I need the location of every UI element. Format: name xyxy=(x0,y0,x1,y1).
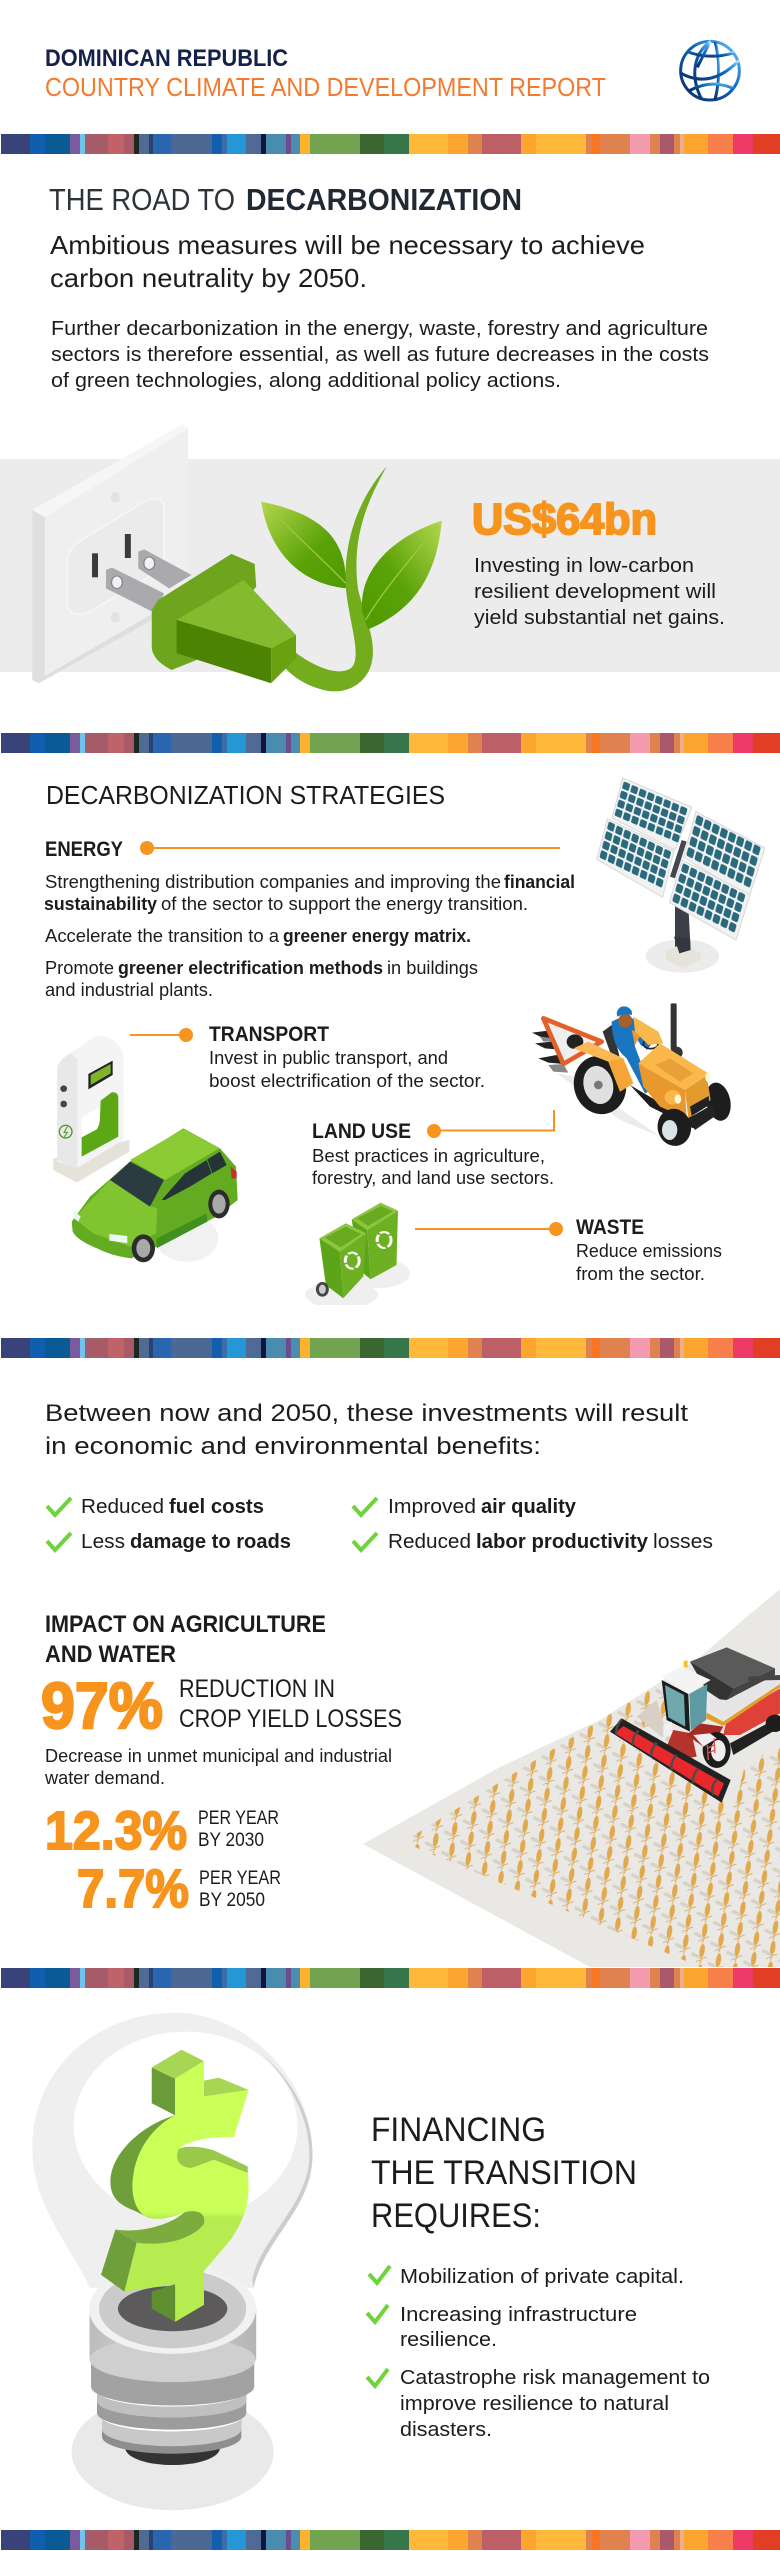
strategy: transport: boost electrification of the sector. xyxy=(209,1070,485,1091)
strategy: transport: Invest in public transport, and xyxy=(209,1047,448,1068)
benefit: reduced labor productivity losses: Reduced xyxy=(388,1531,471,1553)
item: catastrophe risk management: improve resilience to natural xyxy=(400,2393,669,2415)
hood xyxy=(638,1043,708,1090)
illustration: green plug with leaves in wall socket xyxy=(32,424,442,691)
stat: 7.7%: BY 2050 xyxy=(199,1890,265,1911)
water demand text xyxy=(44,1746,392,1788)
callout: US$64bn: US$64bn xyxy=(472,495,657,544)
stat: 12.3%: BY 2030 xyxy=(198,1830,264,1851)
item: catastrophe risk management: disasters. xyxy=(400,2419,492,2441)
illustration: recycling bins xyxy=(305,1203,410,1305)
heading: financing the transition requires: REQUIRES: xyxy=(371,2197,541,2235)
heading: impact on agriculture and water: AND WATER xyxy=(45,1641,176,1668)
strategy: waste: Reduce emissions xyxy=(576,1240,722,1261)
callout: US$64bn: resilient development will xyxy=(474,581,716,603)
benefit: less damage to roads: Less xyxy=(81,1531,125,1553)
intro paragraph: sectors is therefore essential, as well as future decreases in the costs xyxy=(51,344,709,366)
strategy: energy: greener energy matrix. xyxy=(283,925,471,946)
stat: 7.7%: PER YEAR xyxy=(199,1868,281,1889)
benefit: reduced labor productivity losses: labor productivity xyxy=(476,1531,649,1553)
colour stripe 3 xyxy=(1,1338,780,1358)
benefit: reduced fuel costs xyxy=(47,1496,264,1518)
item: catastrophe risk management: Catastrophe risk management to xyxy=(400,2367,710,2389)
stat: 12.3% xyxy=(45,1801,279,1861)
strategy: transport: TRANSPORT xyxy=(209,1023,329,1046)
strategy: waste xyxy=(415,1216,722,1284)
strategy: energy: of the sector to support the energy transition. xyxy=(161,893,528,914)
header: report title xyxy=(45,45,606,102)
charger xyxy=(53,1036,129,1183)
plug prongs xyxy=(106,549,192,613)
heading: financing the transition requires: THE TRANSITION xyxy=(371,2154,637,2192)
header xyxy=(610,1718,731,1803)
illustration: tractor with farmer xyxy=(532,1003,734,1149)
subheading: Ambitious measures will be necessary to achieve xyxy=(50,230,645,260)
heading: impact on agriculture and water: IMPACT ON AGRICULTURE xyxy=(45,1611,326,1638)
strategy: land use: LAND USE xyxy=(312,1120,411,1143)
strategy: waste: from the sector. xyxy=(576,1263,705,1284)
item: infrastructure resilience xyxy=(367,2304,637,2351)
subheading: carbon neutrality by 2050. xyxy=(50,263,367,293)
strategy: energy: Strengthening distribution companies and improving the xyxy=(45,871,501,892)
heading: financing the transition requires xyxy=(371,2111,637,2235)
strategy: land use: Best practices in agriculture, xyxy=(312,1145,545,1166)
colour stripe 2 xyxy=(1,733,780,753)
callout: US$64bn: yield substantial net gains. xyxy=(474,607,725,629)
stat: 97% xyxy=(41,1669,402,1742)
callout: US$64bn: Investing in low-carbon xyxy=(474,555,694,577)
intro paragraph: Further decarbonization in the energy, waste, forestry and agriculture xyxy=(51,318,708,340)
benefit: reduced labor productivity losses: losses xyxy=(653,1531,713,1553)
lamp base xyxy=(89,2263,256,2465)
strategy: land use: forestry, and land use sectors. xyxy=(312,1167,554,1188)
back bin xyxy=(352,1203,398,1279)
strategy: waste: WASTE xyxy=(576,1216,644,1239)
benefit: reduced labor productivity losses xyxy=(353,1531,713,1553)
plug body xyxy=(152,554,296,683)
car xyxy=(72,1128,238,1262)
item: infrastructure resilience: resilience. xyxy=(400,2329,497,2351)
wall plate xyxy=(32,424,188,683)
water demand text: water demand. xyxy=(44,1768,165,1788)
stat: 7.7%: 7.7% xyxy=(77,1859,189,1919)
glass bulb xyxy=(32,2013,312,2288)
benefits heading: in economic and environmental benefits: xyxy=(45,1433,541,1460)
crops xyxy=(403,1680,780,1967)
strategy: transport xyxy=(130,1023,485,1091)
vine xyxy=(279,467,387,691)
benefit: less damage to roads xyxy=(47,1531,291,1553)
strategy: energy: financial xyxy=(504,871,575,892)
dollar sign xyxy=(101,2050,249,2322)
stat: 97%: REDUCTION IN xyxy=(179,1675,335,1703)
heading: the road to decarbonization: DECARBONIZATION xyxy=(246,182,522,217)
report name: COUNTRY CLIMATE AND DEVELOPMENT REPORT xyxy=(45,74,606,102)
strategy: energy xyxy=(44,838,575,1000)
driver xyxy=(612,1006,658,1093)
strategy: energy: greener electrification methods xyxy=(118,957,383,978)
benefits checklist xyxy=(47,1496,713,1553)
colour stripe 1 xyxy=(1,134,780,154)
strategy: energy: Promote xyxy=(45,957,114,978)
strategy: land use xyxy=(312,1110,554,1188)
benefit: improved air quality xyxy=(353,1496,577,1518)
heading: impact on agriculture and water xyxy=(45,1611,326,1668)
stat: 97%: 97% xyxy=(41,1669,163,1742)
intro paragraph: of green technologies, along additional policy actions. xyxy=(51,370,561,392)
item: infrastructure resilience: Increasing infrastructure xyxy=(400,2304,637,2326)
icon: World Bank globe logo xyxy=(680,41,739,100)
strategy: energy: and industrial plants. xyxy=(45,979,213,1000)
combine harvester xyxy=(610,1647,780,1803)
illustration: light bulb with dollar sign xyxy=(32,2013,312,2510)
heading: the road to decarbonization: THE ROAD TO xyxy=(49,182,235,217)
water demand text: Decrease in unmet municipal and industrial xyxy=(45,1746,392,1766)
colour stripe 4 xyxy=(1,1968,780,1988)
front bin xyxy=(316,1223,366,1298)
benefit: reduced fuel costs: Reduced xyxy=(81,1496,164,1518)
fender xyxy=(573,1042,633,1092)
subheading xyxy=(50,230,645,293)
item: catastrophe risk management xyxy=(367,2367,710,2441)
benefits heading xyxy=(45,1400,688,1460)
benefit: reduced fuel costs: fuel costs xyxy=(169,1496,264,1518)
callout: US$64bn xyxy=(472,495,725,629)
panel: grey investment band xyxy=(0,459,780,672)
stat: 97%: CROP YIELD LOSSES xyxy=(179,1705,402,1733)
strategy: energy: sustainability xyxy=(44,893,158,914)
colour stripe 5 xyxy=(1,2530,780,2550)
stat: 12.3%: 12.3% xyxy=(45,1801,187,1861)
heading: financing the transition requires: FINANCING xyxy=(371,2111,546,2149)
heading: the road to decarbonization xyxy=(49,182,522,217)
illustration: harvested field xyxy=(363,1589,780,1967)
financing checklist xyxy=(367,2266,710,2441)
strategy: energy: ENERGY xyxy=(45,838,123,861)
stat: 12.3%: PER YEAR xyxy=(198,1808,279,1829)
report country: DOMINICAN REPUBLIC xyxy=(45,45,288,72)
benefit: improved air quality: Improved xyxy=(388,1496,476,1518)
strategy: energy: Accelerate the transition to a xyxy=(45,925,280,946)
stat: 7.7% xyxy=(77,1859,281,1919)
illustration: EV charger and green car xyxy=(53,1036,238,1262)
strategy: energy: in buildings xyxy=(387,957,478,978)
benefit: improved air quality: air quality xyxy=(481,1496,577,1518)
field ground xyxy=(363,1589,780,1967)
benefits heading: Between now and 2050, these investments will result xyxy=(45,1400,688,1427)
intro paragraph xyxy=(51,318,709,392)
benefit: less damage to roads: damage to roads xyxy=(130,1531,291,1553)
heading: decarbonization strategies: DECARBONIZATION STRATEGIES xyxy=(46,780,445,810)
item: private capital: Mobilization of private capital. xyxy=(400,2266,684,2288)
illustration: solar panels xyxy=(597,778,765,973)
leaves xyxy=(261,502,442,629)
